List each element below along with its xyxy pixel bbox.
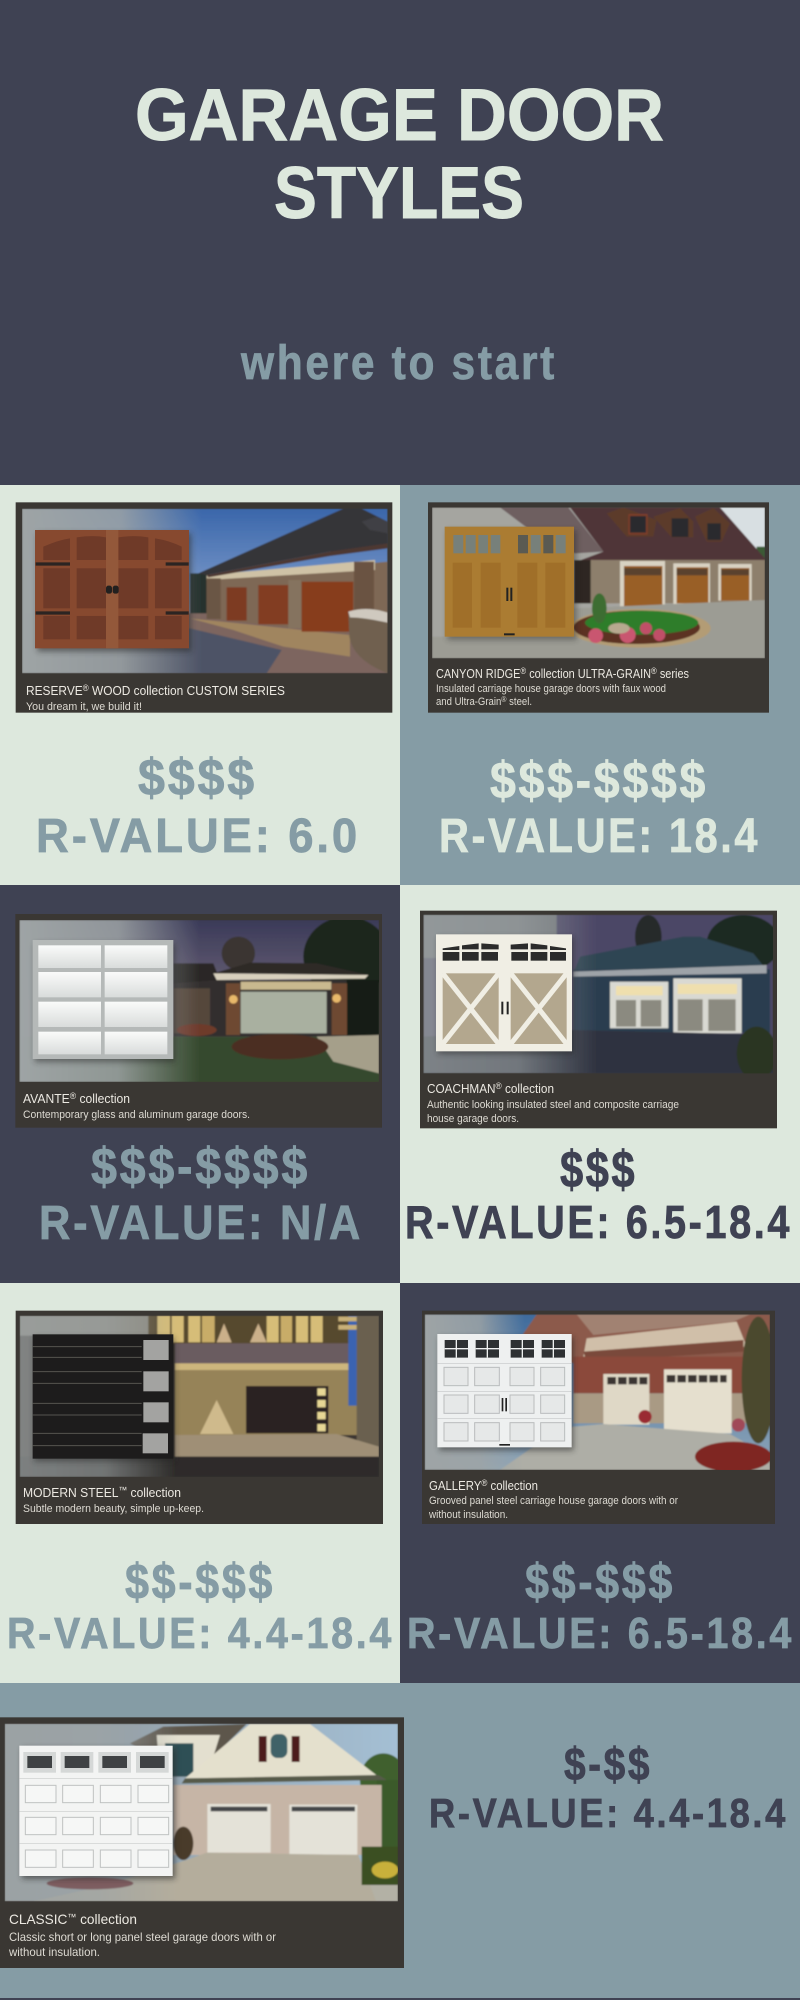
caption: modern steel bbox=[23, 1485, 204, 1515]
header panel bbox=[0, 0, 800, 485]
icon: wood door bbox=[35, 530, 191, 652]
caption: canyon ridge bbox=[436, 666, 689, 708]
icon: white grooved door bbox=[437, 1334, 574, 1451]
price: gallery: $$-$$$ bbox=[525, 1554, 675, 1610]
icon: faux wood door bbox=[445, 527, 577, 640]
price: avante: R-VALUE: N/A bbox=[39, 1197, 363, 1250]
price: coachman: $$$ bbox=[560, 1141, 637, 1199]
caption: classic: Classic short or long panel steel garage doors with or bbox=[9, 1931, 276, 1944]
photo card: modern steel door bbox=[16, 1311, 383, 1524]
caption: canyon ridge: and Ultra-Grain bbox=[436, 696, 510, 708]
caption: avante: AVANTE bbox=[23, 1092, 72, 1106]
caption: modern steel: MODERN STEEL bbox=[23, 1486, 122, 1500]
price: reserve bbox=[36, 749, 360, 863]
icon: classic white door bbox=[19, 1746, 175, 1879]
caption: avante: collection bbox=[76, 1092, 130, 1106]
caption: gallery: collection bbox=[487, 1479, 538, 1493]
price: reserve: $$$$ bbox=[138, 749, 257, 807]
title: GARAGE DOOR bbox=[135, 75, 664, 156]
caption: coachman: COACHMAN bbox=[427, 1082, 500, 1096]
caption: avante: ® bbox=[70, 1091, 76, 1101]
caption: gallery bbox=[428, 1478, 678, 1521]
caption: canyon ridge: ® bbox=[501, 695, 507, 704]
panel: canyon ridge bbox=[400, 485, 800, 885]
caption: avante: Contemporary glass and aluminum garage doors. bbox=[23, 1109, 250, 1121]
price: canyon ridge: R-VALUE: 18.4 bbox=[439, 810, 760, 863]
title: STYLES bbox=[274, 153, 524, 234]
caption: avante bbox=[23, 1091, 250, 1121]
caption: reserve: RESERVE bbox=[26, 683, 89, 698]
caption: reserve: You dream it, we build it! bbox=[26, 701, 142, 713]
title bbox=[135, 75, 664, 234]
caption: reserve: ® bbox=[83, 683, 89, 693]
panel: avante bbox=[15, 914, 382, 1240]
subtitle: where to start bbox=[240, 337, 557, 390]
caption: coachman: collection bbox=[502, 1082, 554, 1096]
caption: canyon ridge: series bbox=[657, 667, 689, 681]
photo card: reserve wood door bbox=[16, 502, 392, 713]
price: avante bbox=[39, 1138, 363, 1250]
price: modern steel: R-VALUE: 4.4-18.4 bbox=[7, 1609, 394, 1658]
caption: gallery: without insulation. bbox=[428, 1509, 508, 1521]
price: canyon ridge: $$$-$$$$ bbox=[490, 752, 708, 810]
caption: canyon ridge: Insulated carriage house garage doors with faux wood bbox=[436, 683, 666, 695]
price: canyon ridge bbox=[439, 752, 760, 863]
caption: gallery: Grooved panel steel carriage house garage doors with or bbox=[429, 1495, 678, 1507]
caption: reserve: WOOD collection CUSTOM SERIES bbox=[89, 683, 285, 698]
caption: modern steel: collection bbox=[127, 1486, 181, 1500]
panel: modern steel bbox=[0, 1283, 400, 1683]
caption: classic: ™ bbox=[67, 1912, 76, 1922]
caption: classic: CLASSIC bbox=[9, 1912, 68, 1927]
caption: modern steel: ™ bbox=[119, 1485, 127, 1495]
price: coachman bbox=[405, 1141, 792, 1248]
caption: canyon ridge: ® bbox=[520, 666, 526, 676]
price: reserve: R-VALUE: 6.0 bbox=[36, 810, 360, 863]
icon: carriage door bbox=[436, 934, 574, 1054]
photo card: classic door bbox=[0, 1717, 407, 1968]
caption: canyon ridge: collection ULTRA-GRAIN bbox=[526, 667, 651, 681]
panel: reserve wood bbox=[0, 485, 400, 885]
caption: modern steel: Subtle modern beauty, simple up-keep. bbox=[23, 1503, 204, 1515]
caption: reserve bbox=[26, 683, 285, 713]
caption: classic bbox=[8, 1912, 276, 1959]
caption: gallery: GALLERY bbox=[429, 1479, 487, 1493]
panel: coachman bbox=[400, 885, 800, 1283]
photo card: gallery door bbox=[422, 1311, 775, 1524]
panel: classic bbox=[0, 1683, 800, 2000]
panel: gallery bbox=[409, 1310, 792, 1649]
photo card: avante door bbox=[15, 914, 390, 1128]
caption: coachman: ® bbox=[496, 1081, 502, 1091]
icon: black steel door bbox=[33, 1334, 175, 1462]
price: modern steel bbox=[7, 1554, 394, 1658]
price: classic: $-$$ bbox=[564, 1738, 652, 1790]
icon: glass door bbox=[33, 940, 175, 1062]
photo card: canyon ridge door bbox=[428, 502, 769, 713]
price: avante: $$$-$$$$ bbox=[91, 1138, 310, 1196]
caption: coachman bbox=[427, 1081, 679, 1125]
price: classic bbox=[429, 1738, 788, 1836]
caption: canyon ridge: CANYON RIDGE bbox=[436, 667, 533, 681]
caption: canyon ridge: steel. bbox=[507, 696, 532, 708]
caption: classic: without insulation. bbox=[8, 1946, 100, 1959]
caption: classic: collection bbox=[76, 1912, 137, 1927]
caption: canyon ridge: ® bbox=[651, 666, 657, 676]
caption: coachman: Authentic looking insulated steel and composite carriage bbox=[427, 1099, 679, 1111]
price: gallery bbox=[407, 1554, 794, 1658]
caption: gallery: ® bbox=[481, 1478, 488, 1488]
photo card: coachman door bbox=[420, 911, 780, 1128]
caption: coachman: house garage doors. bbox=[427, 1113, 519, 1125]
price: modern steel: $$-$$$ bbox=[125, 1554, 275, 1610]
